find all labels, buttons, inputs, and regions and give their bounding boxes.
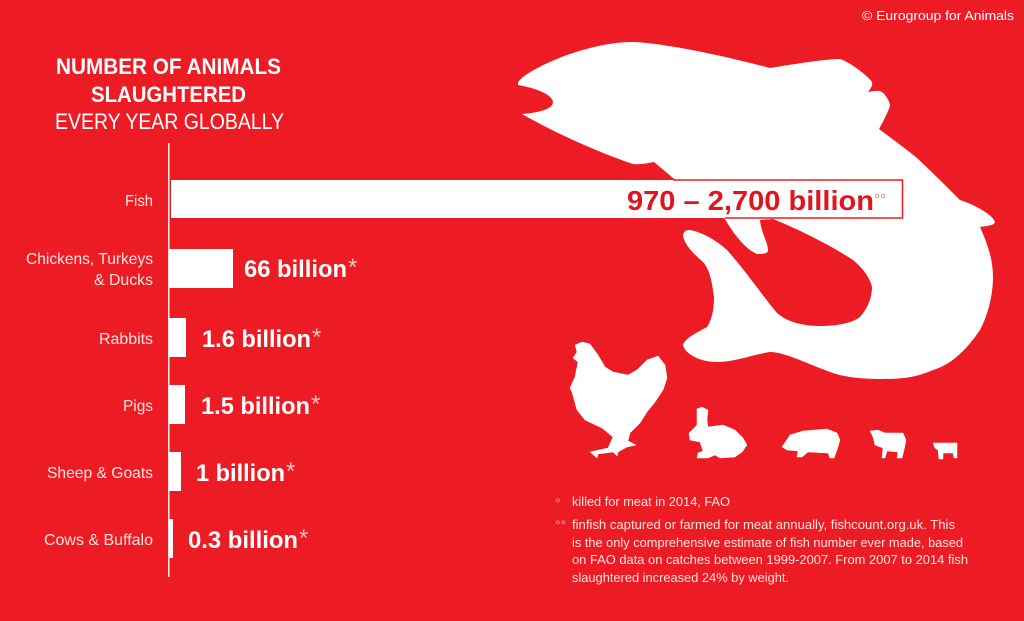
footnote: double asterisk: slaughtered increased 24% by weight. [572,570,789,585]
row: pigs: 1.5 billion [201,393,310,420]
row: sheep and goats: Sheep & Goats [47,465,153,482]
row: fish [125,180,903,218]
row: pigs: Pigs [123,398,153,415]
bar chart [26,180,903,558]
row: fish: °° [874,191,886,208]
footnote: single asterisk: killed for meat in 2014, FAO [572,494,730,509]
row: rabbits: 1.6 billion [202,326,311,353]
row: rabbits: * [312,324,321,351]
row: chickens, turkeys and ducks: Chickens, Turkeys [26,251,153,268]
row: cows and buffalo: * [299,525,308,552]
row: rabbits: Rabbits [99,331,153,348]
row: fish: 970 – 2,700 billion [627,185,874,216]
row: cows and buffalo: Cows & Buffalo [44,532,153,549]
row: sheep and goats [47,452,295,491]
icon: rabbit [689,407,747,458]
row: cows and buffalo: 0.3 billion [188,527,298,554]
row: rabbits [99,318,321,357]
icon: cow [933,443,957,459]
footnotes [555,494,968,585]
row: pigs [123,385,320,424]
icon: fish silhouette [518,42,995,379]
icon: chicken [570,342,667,458]
footnote: single asterisk: ° [555,495,561,511]
icon: sheep [870,430,906,458]
footnote: double asterisk: finfish captured or farmed for meat annually, fishcount.org.uk. This [572,517,955,532]
copyright credit: © Eurogroup for Animals [862,8,1015,23]
title [55,54,284,134]
row: fish: Fish [125,193,153,210]
row: sheep and goats: 1 billion [196,460,285,487]
row: pigs: * [311,391,320,418]
footnote: double asterisk: is the only comprehensive estimate of fish number ever made, based [572,535,963,550]
title: EVERY YEAR GLOBALLY [55,109,284,134]
axis line [168,143,170,577]
title: SLAUGHTERED [91,82,246,107]
row: chickens, turkeys and ducks [26,249,357,289]
footnote: double asterisk [555,517,968,585]
footnote: double asterisk: on FAO data on catches between 1999-2007. From 2007 to 2014 fish [572,552,968,567]
title: NUMBER OF ANIMALS [56,54,281,79]
row: sheep and goats: * [286,458,295,485]
footnote: double asterisk: °° [555,517,566,533]
row: chickens, turkeys and ducks: * [348,254,357,281]
icon: pig [782,429,840,458]
row: chickens, turkeys and ducks: & Ducks [94,272,153,289]
row: chickens, turkeys and ducks: 66 billion [244,256,347,283]
row: cows and buffalo [44,519,308,558]
